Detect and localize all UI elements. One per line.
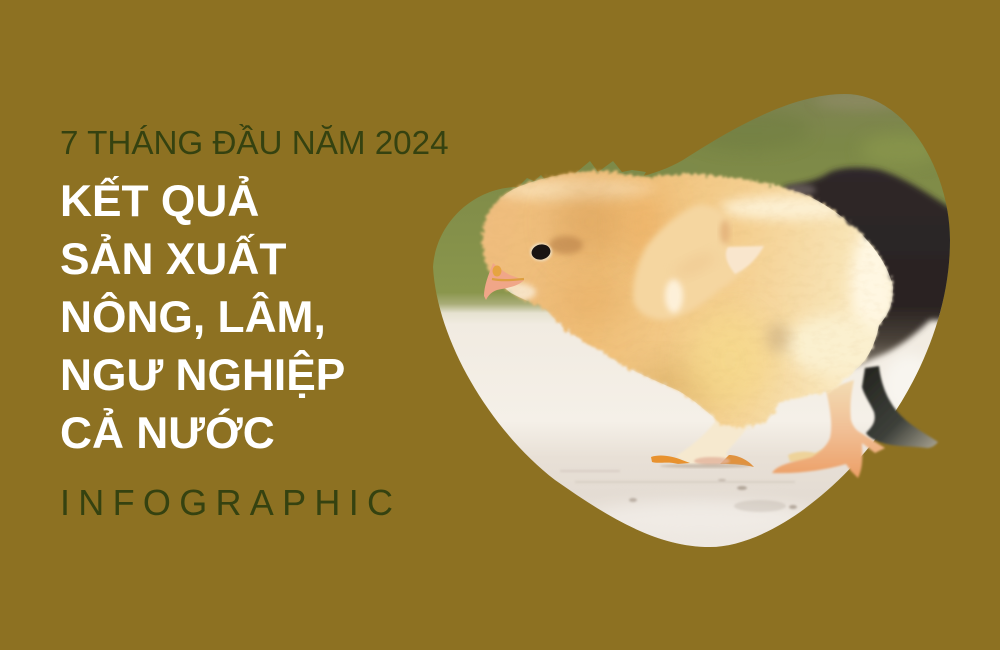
main title: SẢN XUẤT (60, 235, 286, 284)
yellow chick (480, 160, 900, 478)
main title: NÔNG, LÂM, (60, 293, 326, 342)
photo: chicks in organic blob (433, 94, 950, 547)
main title: KẾT QUẢ (60, 177, 259, 226)
wing (633, 205, 764, 320)
main title (60, 176, 345, 458)
black chick (783, 168, 960, 448)
beak (484, 263, 524, 300)
head shading near eye (549, 236, 583, 254)
label: infographic: INFOGRAPHIC (60, 482, 401, 523)
eye (530, 243, 552, 261)
main title: NGƯ NGHIỆP (60, 351, 345, 400)
back leg and foot (772, 380, 885, 478)
black chick leg (862, 366, 938, 448)
body shading (498, 171, 893, 423)
photo background inside blob (430, 90, 955, 550)
main title: CẢ NƯỚC (60, 409, 275, 458)
subtitle: period: 7 THÁNG ĐẦU NĂM 2024 (60, 125, 449, 162)
fur tips above blob (518, 160, 700, 187)
chick body (483, 171, 893, 427)
ground texture (560, 470, 797, 512)
page background (61, 94, 950, 547)
front leg and foot (651, 418, 754, 468)
